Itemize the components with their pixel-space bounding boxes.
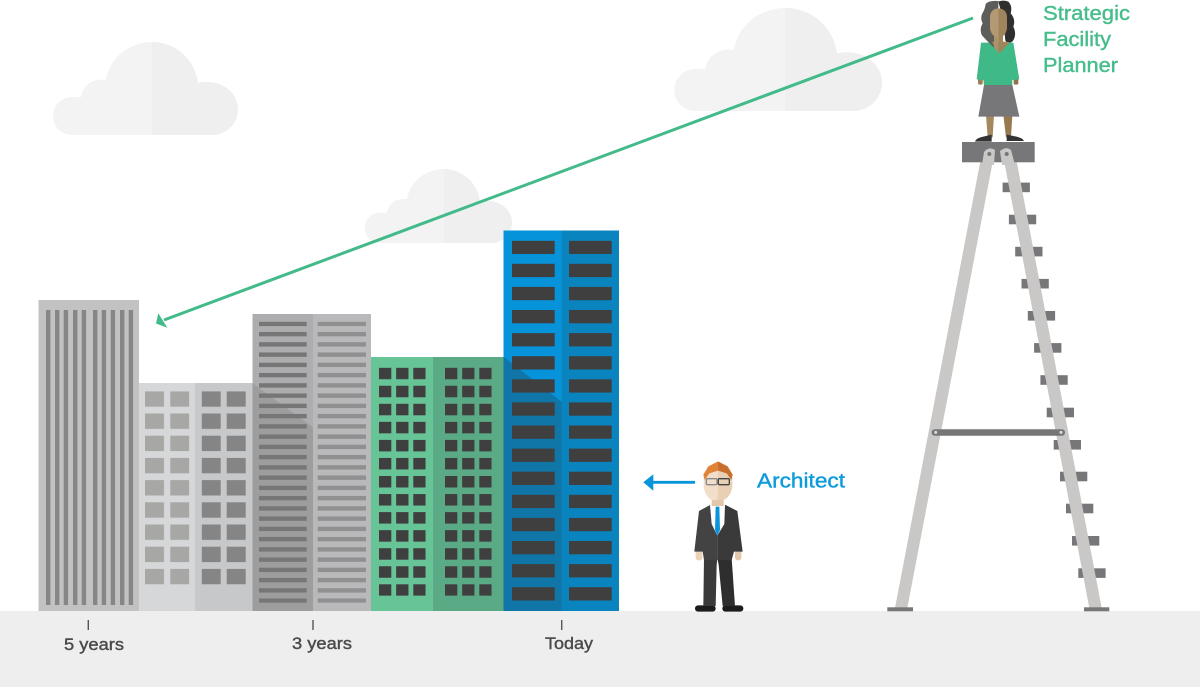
- architect head: [703, 461, 733, 506]
- cloud: left: [53, 42, 238, 135]
- label: Strategic Facility Planner: Strategic: [1043, 3, 1130, 25]
- ladder legs: [895, 150, 1102, 608]
- timeline label: Today: Today: [545, 635, 594, 653]
- label: Strategic Facility Planner: Planner: [1043, 55, 1118, 77]
- label: Architect: Architect: [757, 470, 845, 492]
- figure: strategic facility planner: [975, 1, 1024, 142]
- building: tall grey with vertical stripes: [38, 300, 139, 611]
- building: low light grey: [139, 383, 253, 611]
- ladder feet: [887, 607, 1109, 611]
- ladder crossbar: [932, 429, 1065, 436]
- timeline label: 5 years: 5 years: [64, 636, 124, 654]
- building: mid grey with louvres: [252, 314, 371, 611]
- timeline label: Today: [545, 620, 594, 653]
- timeline label: 3 years: 3 years: [292, 635, 352, 653]
- ground: [0, 611, 1200, 687]
- building: green: [371, 357, 504, 611]
- arrow: planner sightline to 5 years: [156, 18, 973, 328]
- timeline label: 3 years: [292, 620, 352, 653]
- ladder top platform: [962, 142, 1035, 165]
- cloud: right: [674, 8, 882, 111]
- building: blue: [504, 230, 619, 611]
- planner head and hair: [981, 1, 1015, 53]
- label: Strategic Facility Planner: Facility: [1043, 29, 1111, 51]
- ladder steps: [1003, 183, 1106, 578]
- figure: architect: [694, 461, 743, 612]
- cloud: middle: [365, 169, 512, 243]
- label: Strategic Facility Planner: [1043, 3, 1130, 77]
- arrow: architect sightline to today: [643, 474, 695, 491]
- ladder: [887, 142, 1109, 611]
- timeline label: 5 years: [64, 620, 124, 654]
